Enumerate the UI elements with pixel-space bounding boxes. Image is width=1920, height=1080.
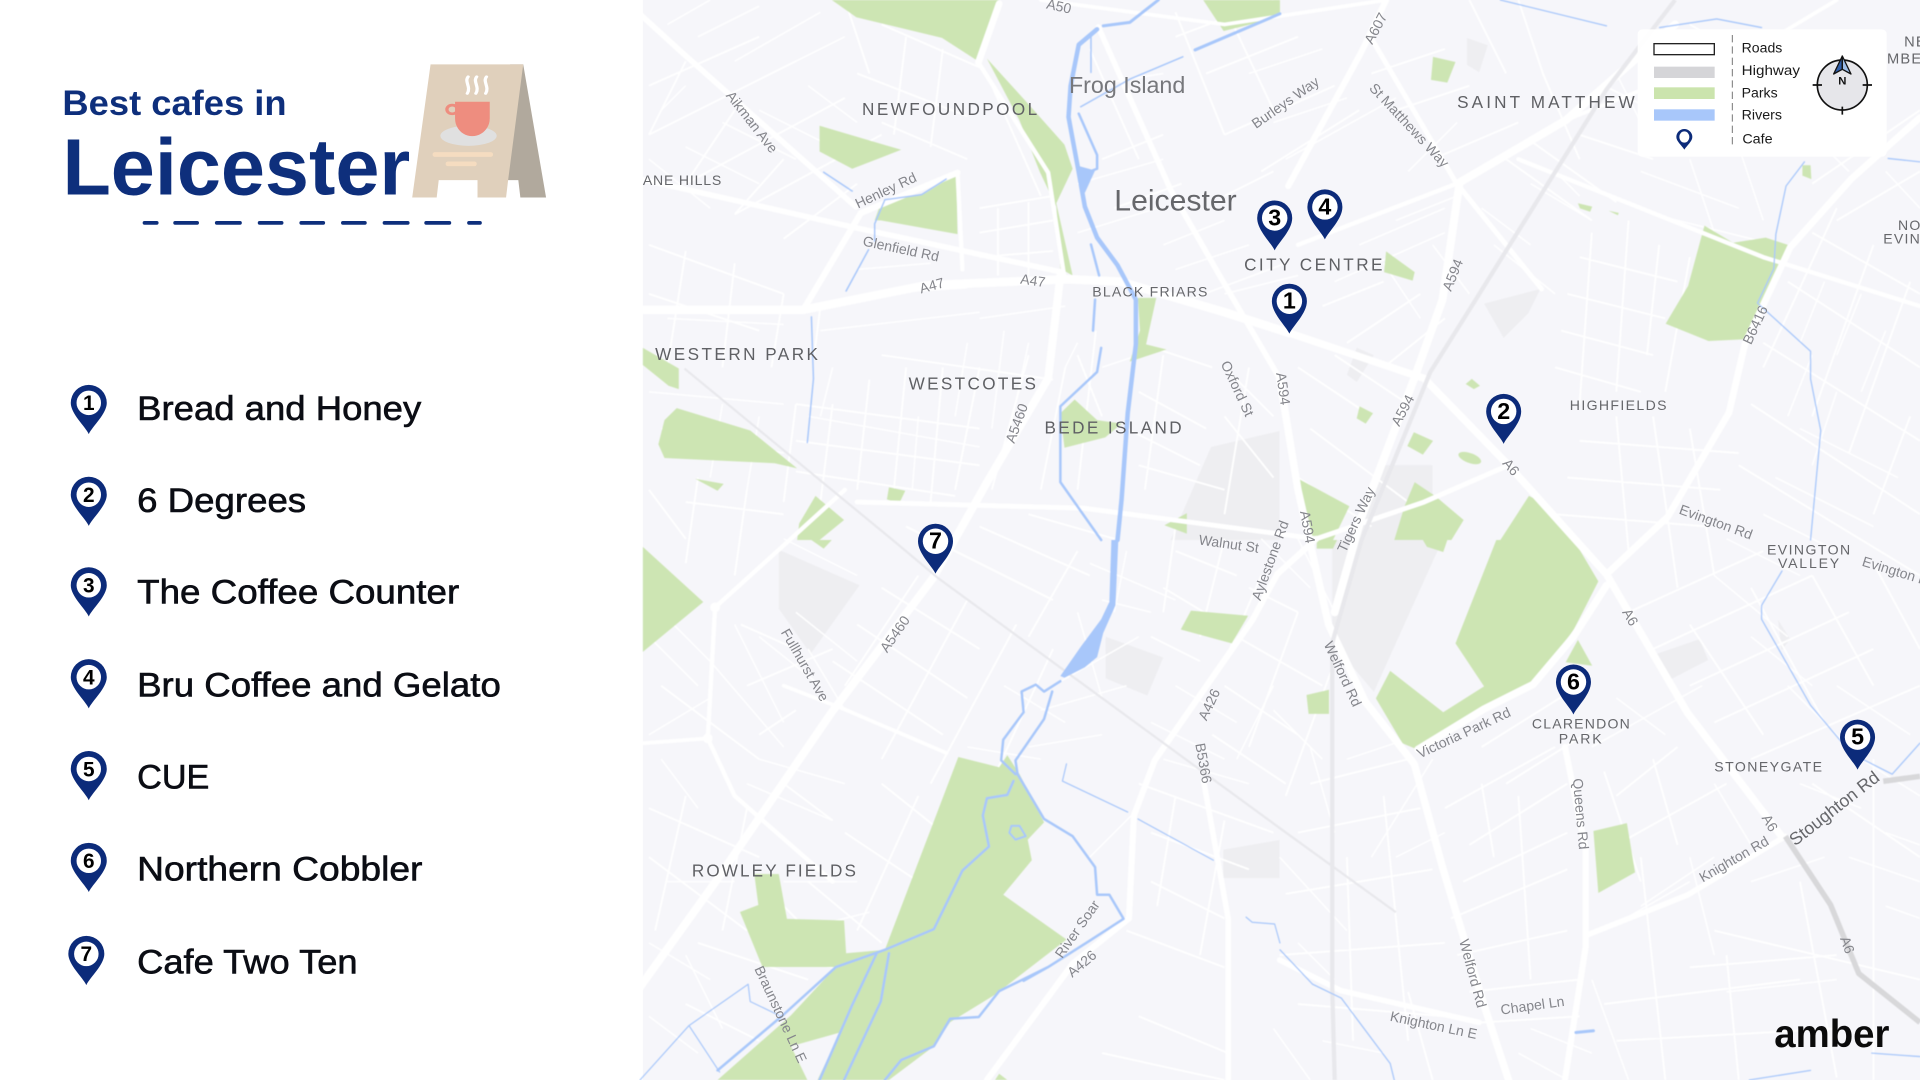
map: road labels: Chapel Ln: [1499, 993, 1565, 1018]
item 3: The Coffee Counter: [137, 574, 459, 612]
map: road labels: Queens Rd: [1570, 778, 1592, 850]
map: area labels: ANE HILLS: [643, 172, 721, 188]
map: road labels: A594: [1439, 256, 1466, 293]
map: road labels: A6: [1500, 455, 1523, 479]
legend panel: Parks: [1742, 85, 1778, 100]
item 6: Northern Cobbler: [137, 850, 422, 888]
map: road labels: Glenfield Rd: [861, 233, 941, 264]
map pin 1: 1: [1283, 288, 1296, 314]
map: road labels: Burleys Way: [1249, 73, 1323, 132]
item 4: [71, 659, 501, 708]
map: area labels: CITY CENTRE: [1244, 255, 1382, 275]
map pin 3: 3: [1268, 204, 1281, 230]
map: area labels: ROWLEY FIELDS: [692, 861, 856, 881]
map: road labels: Evington Rd: [1677, 501, 1755, 542]
icon: compass: N: [1838, 76, 1846, 88]
map: road labels: Stoughton Rd: [1785, 767, 1883, 850]
item 3: [71, 567, 459, 617]
item 2: 2: [83, 484, 95, 507]
icon: cafe A-board: [412, 64, 546, 198]
map: road labels: Knighton Rd: [1696, 833, 1771, 885]
map: road labels: Aikman Ave: [723, 88, 781, 156]
item 7: Cafe Two Ten: [137, 943, 358, 981]
map: area labels: EVINGTON: [1767, 542, 1850, 558]
icon: compass: [1813, 56, 1872, 115]
item 4: Bru Coffee and Gelato: [137, 667, 501, 705]
legend panel: Roads: [1742, 41, 1782, 56]
map: rivers: [640, 0, 1920, 1080]
map: road labels: B5366: [1192, 742, 1215, 785]
map: area labels: VALLEY: [1778, 555, 1840, 571]
amber logo: amber: [1774, 1013, 1889, 1056]
map: area labels: [643, 72, 1920, 881]
map pin 2: 2: [1497, 398, 1510, 424]
map: area labels: EVIN: [1883, 231, 1920, 247]
map: area labels: BEDE ISLAND: [1044, 417, 1182, 437]
item 5: [71, 751, 209, 800]
map: road labels: Walnut St: [1198, 531, 1260, 556]
map: road labels: A594: [1273, 371, 1294, 406]
item 5: CUE: [137, 759, 209, 797]
map: road labels: Tigers Way: [1334, 483, 1378, 555]
legend panel: Highway: [1742, 63, 1800, 78]
map: minor roads: [649, 0, 1920, 1080]
map: area labels: STONEYGATE: [1714, 758, 1822, 774]
title: Leicester: [62, 123, 410, 212]
map: road labels: A6: [1759, 811, 1781, 834]
item 1: Bread and Honey: [137, 390, 422, 428]
map: road labels: A5460: [876, 612, 913, 655]
map: road labels: Oxford St: [1218, 358, 1257, 419]
map: road labels: Henley Rd: [852, 169, 919, 211]
map: road labels: A594: [1297, 509, 1319, 545]
map: road labels: Fullhurst Ave: [778, 626, 832, 704]
item 4: 4: [83, 666, 95, 689]
title: [62, 83, 410, 212]
map: road labels: A426: [1064, 947, 1100, 980]
item 7: [68, 936, 358, 985]
map: road labels: River Soar: [1052, 897, 1103, 961]
map pin 1: [1272, 284, 1307, 334]
item 6: [71, 843, 422, 892]
map: road labels: Braunstone Ln E: [751, 963, 810, 1065]
map: road labels: [723, 0, 1920, 1065]
map: built-up grey areas: [779, 38, 1790, 878]
map: area labels: SAINT MATTHEW: [1457, 92, 1636, 112]
map: road labels: A594: [1388, 392, 1417, 429]
item 7: 7: [81, 943, 92, 966]
map: road labels: St Matthews Way: [1366, 80, 1453, 171]
item 2: 6 Degrees: [137, 482, 306, 520]
map: area labels: Leicester: [1114, 185, 1237, 218]
legend panel: Cafe: [1742, 132, 1773, 147]
map: area labels: Frog Island: [1069, 72, 1185, 98]
list: cafes: [68, 385, 501, 985]
map: road labels: A6: [1837, 934, 1858, 956]
map pin 5: [1840, 720, 1875, 770]
map: road labels: Welford Rd: [1321, 639, 1365, 709]
map pin 7: [918, 524, 953, 574]
map: area labels: HIGHFIELDS: [1570, 397, 1667, 413]
legend panel: Rivers: [1742, 107, 1782, 122]
item 3: 3: [83, 575, 95, 598]
panel: map: [639, 0, 1920, 1080]
map: main roads: [639, 0, 1920, 1080]
legend panel: [1638, 29, 1887, 157]
icon: legend cafe pin: [1676, 129, 1692, 150]
map pin 3: [1257, 200, 1292, 250]
map pin 4: [1307, 189, 1342, 239]
map: road labels: B6416: [1739, 303, 1771, 347]
map pin 2: [1486, 394, 1521, 444]
item 6: 6: [83, 850, 95, 873]
item 5: 5: [83, 758, 95, 781]
map: road labels: Victoria Park Rd: [1414, 704, 1513, 761]
map: road labels: Knighton Ln E: [1389, 1008, 1479, 1042]
map: road labels: A47: [1019, 271, 1047, 290]
map: area labels: PARK: [1559, 730, 1602, 746]
item 1: 1: [83, 392, 95, 415]
map pin 4: 4: [1318, 193, 1331, 219]
map: road labels: Aylestone Rd: [1248, 518, 1292, 602]
map: area labels: WESTERN PARK: [655, 344, 819, 364]
map: road labels: A6: [1619, 606, 1642, 629]
map: parks: [643, 0, 1811, 1080]
item 1: [71, 385, 422, 434]
dashed divider: [144, 221, 480, 224]
map: area labels: NEWFOUNDPOOL: [862, 99, 1037, 119]
item 2: [71, 477, 306, 526]
title: Best cafes in: [62, 83, 287, 123]
map: road labels: A607: [1361, 10, 1390, 47]
map: road labels: A5460: [1002, 401, 1031, 445]
map pin 7: 7: [929, 528, 942, 554]
map: area labels: CLARENDON: [1532, 716, 1630, 732]
map: area labels: WESTCOTES: [909, 373, 1036, 393]
map: railway: [684, 0, 1675, 1080]
map pin 5: 5: [1851, 723, 1864, 749]
map: road labels: A426: [1195, 686, 1223, 723]
map pin 6: 6: [1567, 668, 1580, 694]
map pin 6: [1556, 665, 1591, 714]
map: road labels: Welford Rd: [1456, 937, 1490, 1009]
map: highway A6: [1785, 776, 1920, 1022]
map: area labels: BLACK FRIARS: [1092, 283, 1207, 299]
map: road labels: A47: [918, 274, 946, 296]
